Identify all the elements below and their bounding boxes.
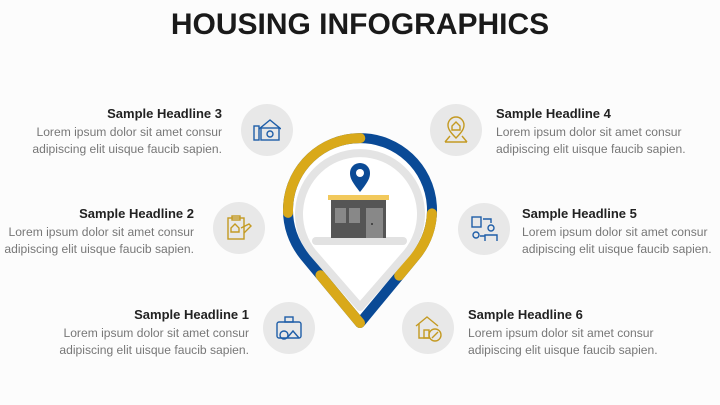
item 3 text: Lorem ipsum dolor sit amet consur xyxy=(36,125,222,139)
item 2 text: Lorem ipsum dolor sit amet consur xyxy=(8,225,194,239)
item 1 text: Lorem ipsum dolor sit amet consur xyxy=(63,326,249,340)
icon 6: house discount xyxy=(402,302,454,354)
item 4 text xyxy=(496,106,686,156)
item 6 text: Sample Headline 6 xyxy=(468,307,583,322)
item 2 text: Sample Headline 2 xyxy=(79,206,194,221)
item 5 text xyxy=(522,206,712,256)
icon 5: office people xyxy=(458,203,510,255)
icon 2: contract xyxy=(213,202,265,254)
item 6 text xyxy=(468,307,658,357)
item 3 text xyxy=(32,106,222,156)
item 5 text: Sample Headline 5 xyxy=(522,206,637,221)
icon 1: briefcase xyxy=(263,302,315,354)
title: HOUSING INFOGRAPHICS xyxy=(171,8,549,41)
item 1 text: Sample Headline 1 xyxy=(134,307,249,322)
item 6 text: adipiscing elit uisque faucib sapien. xyxy=(468,343,658,357)
item 2 text xyxy=(4,206,194,256)
building xyxy=(312,195,407,245)
item 4 text: Sample Headline 4 xyxy=(496,106,611,121)
item 3 text: adipiscing elit uisque faucib sapien. xyxy=(32,142,222,156)
item 5 text: Lorem ipsum dolor sit amet consur xyxy=(522,225,708,239)
item 4 text: Lorem ipsum dolor sit amet consur xyxy=(496,125,682,139)
item 5 text: adipiscing elit uisque faucib sapien. xyxy=(522,242,712,256)
item 4 text: adipiscing elit uisque faucib sapien. xyxy=(496,142,686,156)
icon 4: house location xyxy=(430,104,482,156)
item 1 text xyxy=(59,307,249,357)
item 3 text: Sample Headline 3 xyxy=(107,106,222,121)
icon 3: house money xyxy=(241,104,293,156)
item 2 text: adipiscing elit uisque faucib sapien. xyxy=(4,242,194,256)
icon: location marker xyxy=(350,163,370,192)
item 6 text: Lorem ipsum dolor sit amet consur xyxy=(468,326,654,340)
item 1 text: adipiscing elit uisque faucib sapien. xyxy=(59,343,249,357)
